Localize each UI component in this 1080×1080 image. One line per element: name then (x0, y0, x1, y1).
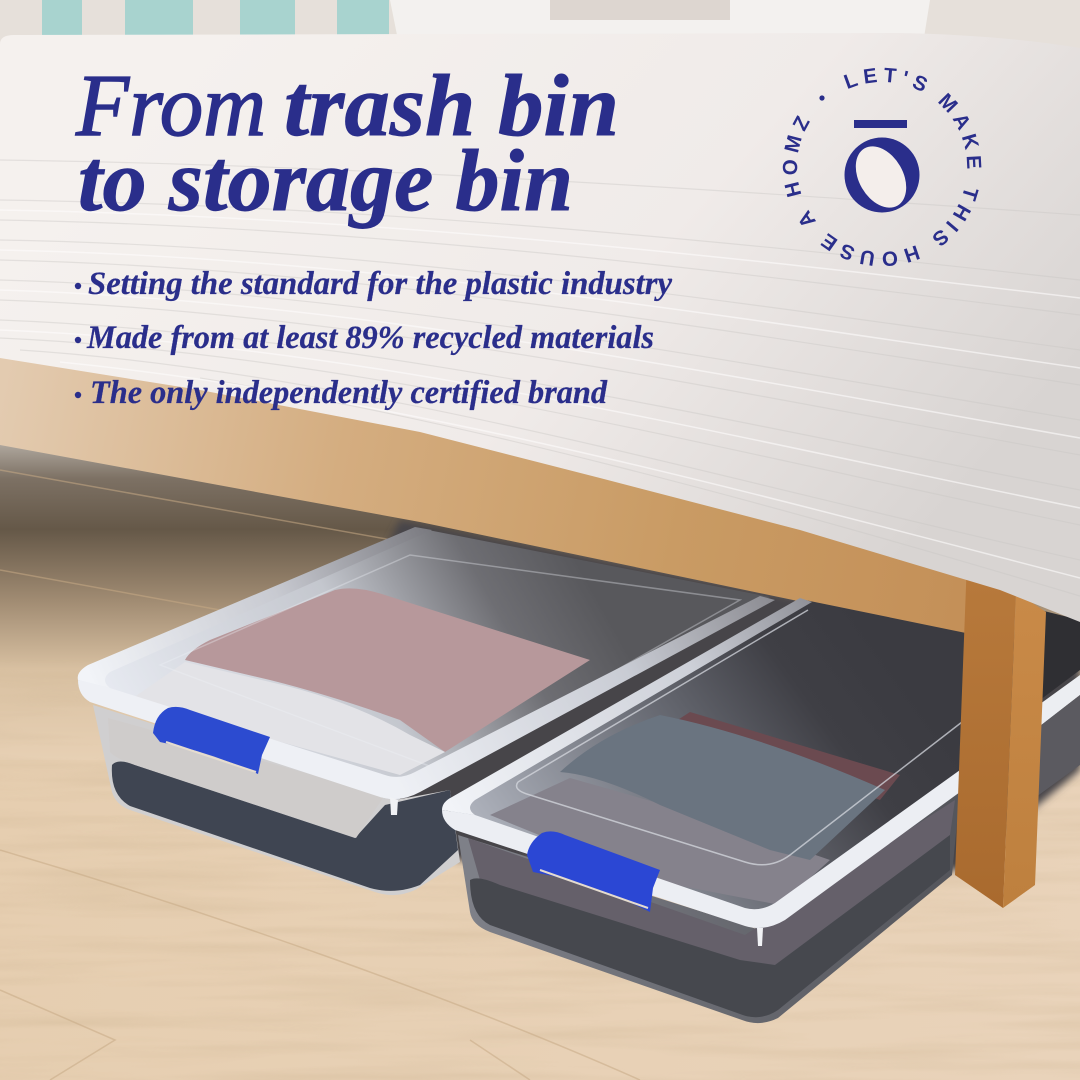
lid inner panel (516, 610, 962, 865)
title: to storage bin (78, 133, 573, 230)
bed frame rail (0, 335, 1000, 636)
bullet: certified: The only independently certified brand (90, 375, 607, 411)
blue-grey folded garment (560, 715, 885, 860)
folded light garment (108, 718, 385, 838)
bullet list (75, 266, 672, 411)
folded pink garment (185, 588, 590, 752)
bin body (458, 790, 960, 1023)
lid rim far side (78, 527, 432, 688)
bullet: recycled: Made from at least 89% recycled materials (86, 320, 654, 356)
dark garment stack (470, 835, 950, 1017)
lid inner panel (160, 555, 740, 770)
floor (0, 440, 1080, 1080)
logo badge (782, 68, 982, 266)
clip tab (390, 797, 398, 815)
bin: right (442, 598, 1080, 1023)
bed leg (955, 560, 1046, 908)
clip tab (757, 928, 763, 946)
folded dark garment (112, 762, 458, 891)
title: trash bin (284, 58, 619, 155)
pink garment edge (670, 712, 900, 800)
lid surface (78, 528, 770, 800)
ring text: LET'S MAKE THIS HOUSE A HOMZ (782, 68, 982, 266)
lower garment (490, 778, 830, 905)
wood grain (0, 660, 1080, 1080)
bin: left (78, 527, 775, 895)
logo mark o (844, 137, 920, 217)
logo mark bar (854, 120, 907, 128)
bin far end behind leg (1036, 610, 1080, 797)
title (75, 58, 619, 230)
duvet stripes (0, 160, 1080, 596)
lid rim right side (380, 596, 775, 799)
background headboard and pillows (0, 0, 1080, 60)
lid rim front (78, 680, 395, 800)
shadow under bed (380, 520, 1080, 870)
blue latch (153, 707, 270, 774)
lid rim far side (442, 598, 812, 815)
bin body (93, 705, 460, 895)
title: From (75, 58, 266, 155)
lid rim front and right (442, 770, 960, 928)
reddish garment layer (468, 800, 955, 965)
lid surface (442, 600, 1000, 930)
ring dot (819, 95, 825, 101)
duvet (0, 33, 1080, 622)
blue latch (527, 831, 660, 912)
bullet: standard: Setting the standard for the plastic industry (88, 266, 672, 302)
